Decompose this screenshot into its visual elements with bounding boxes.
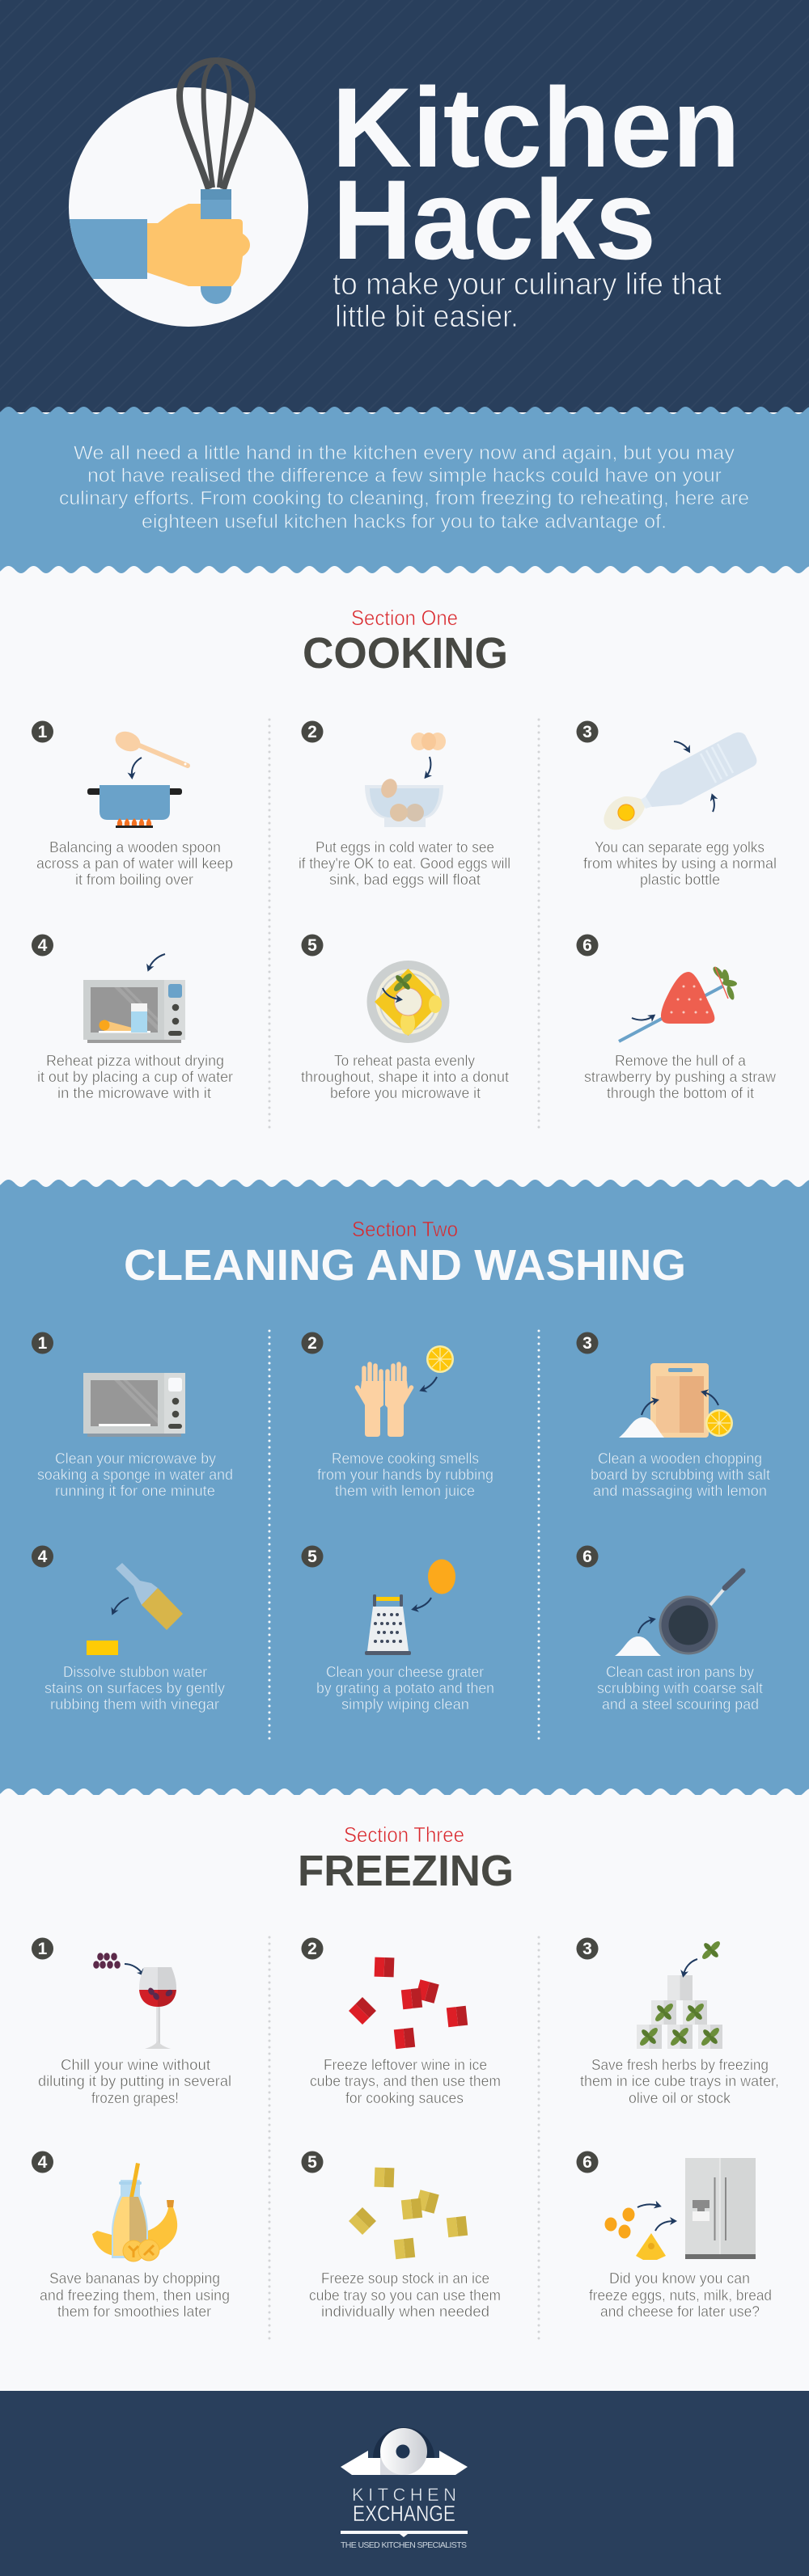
tip text bbox=[299, 839, 510, 888]
number 4: 4 bbox=[38, 2153, 48, 2172]
panel: tip 2 wine cubes bbox=[301, 1937, 501, 2106]
tip text: stains on surfaces by gently bbox=[44, 1680, 225, 1696]
tip text: from your hands by rubbing bbox=[317, 1467, 493, 1483]
subtitle: little bit easier. bbox=[335, 300, 519, 334]
title: Hacks bbox=[332, 156, 656, 283]
panel: tip 2 hands bbox=[301, 1332, 493, 1499]
tip text: rubbing them with vinegar bbox=[50, 1696, 219, 1712]
number 6: 6 bbox=[582, 2153, 592, 2172]
tip text: throughout, shape it into a donut bbox=[301, 1069, 509, 1085]
panel: section one cooking bbox=[32, 606, 777, 1128]
tip text: Freeze leftover wine in ice bbox=[324, 2057, 487, 2073]
number 2: 2 bbox=[307, 1940, 317, 1958]
heading: section three: Section Three bbox=[344, 1822, 464, 1847]
panel: tip 3 herbs bbox=[576, 1937, 779, 2106]
number 1 bbox=[32, 1937, 53, 1960]
tip text bbox=[584, 1053, 777, 1101]
tip text: To reheat pasta evenly bbox=[334, 1053, 475, 1069]
number 1: 1 bbox=[38, 1334, 48, 1353]
icon: fridge, nuts and cheese bbox=[605, 2158, 756, 2260]
logo: Kitchen Exchange bbox=[341, 2427, 468, 2550]
heading: section three bbox=[298, 1822, 514, 1895]
number 3: 3 bbox=[582, 1940, 592, 1958]
icon: eggs and bowl bbox=[365, 733, 446, 827]
icon: smoothie bottle and bananas bbox=[92, 2163, 177, 2261]
number 2: 2 bbox=[307, 1334, 317, 1353]
tip text bbox=[309, 2270, 501, 2320]
number 2: 2 bbox=[307, 723, 317, 741]
tip text bbox=[310, 2057, 501, 2106]
icon: hand holding whisk bbox=[69, 61, 308, 327]
logo: Kitchen Exchange: THE USED KITCHEN SPECIALISTS bbox=[341, 2540, 467, 2550]
logo: Kitchen Exchange: KITCHEN bbox=[352, 2485, 456, 2505]
number 5: 5 bbox=[307, 936, 317, 955]
tip text bbox=[317, 1451, 493, 1499]
number 4: 4 bbox=[38, 1548, 48, 1566]
tip text: plastic bottle bbox=[640, 872, 720, 888]
tip text bbox=[580, 2057, 779, 2106]
tip text: Chill your wine without bbox=[61, 2057, 210, 2073]
intro text: not have realised the difference a few simple hacks could have on your bbox=[87, 465, 722, 487]
number 4 bbox=[32, 1546, 53, 1567]
number 1: 1 bbox=[38, 723, 48, 741]
tip text: it from boiling over bbox=[75, 872, 193, 888]
icon: herb ice cubes bbox=[637, 1940, 722, 2049]
number 3 bbox=[576, 1937, 599, 1960]
panel: tip 3 board bbox=[576, 1332, 770, 1499]
tip text: before you microwave it bbox=[330, 1085, 481, 1101]
tip text bbox=[37, 1451, 233, 1499]
icon: soup stock cubes bbox=[349, 2168, 468, 2259]
heading: section one: COOKING bbox=[303, 629, 508, 678]
logo: Kitchen Exchange: EXCHANGE bbox=[353, 2501, 455, 2526]
tip text: across a pan of water will keep bbox=[36, 855, 233, 872]
tip text bbox=[583, 839, 777, 888]
icon: plastic bottle and egg bbox=[604, 733, 756, 830]
tip text: freeze eggs, nuts, milk, bread bbox=[589, 2287, 772, 2304]
heading: section two bbox=[124, 1217, 686, 1290]
tip text: board by scrubbing with salt bbox=[591, 1467, 770, 1483]
intro text: eighteen useful kitchen hacks for you to take advantage of. bbox=[142, 511, 667, 533]
panel: section two cleaning bbox=[0, 1180, 809, 1797]
tip text: Save bananas by chopping bbox=[49, 2270, 220, 2287]
panel: tip 6 fridge bbox=[576, 2151, 772, 2320]
icon: pan and salt bbox=[615, 1571, 743, 1656]
tip text: Remove cooking smells bbox=[332, 1451, 479, 1467]
panel: tip 1 wine bbox=[32, 1937, 231, 2106]
panel: section three freezing bbox=[32, 1822, 779, 2345]
icon: spoon over pot bbox=[87, 728, 188, 828]
panel: tip 4 pizza bbox=[32, 935, 233, 1101]
tip text: and freezing them, then using bbox=[40, 2287, 230, 2304]
tip text: individually when needed bbox=[321, 2304, 489, 2320]
tip text: scrubbing with coarse salt bbox=[597, 1680, 763, 1696]
tip text: cube tray so you can use them bbox=[309, 2287, 501, 2304]
icon: wine glass and grapes bbox=[93, 1953, 176, 2049]
panel: tip 1 microwave bbox=[32, 1332, 233, 1499]
icon: strawberry and straw bbox=[619, 965, 737, 1041]
number 5 bbox=[301, 935, 324, 956]
heading: section two: CLEANING AND WASHING bbox=[124, 1241, 686, 1290]
subtitle bbox=[332, 268, 722, 334]
number 3 bbox=[576, 1332, 599, 1353]
number 1 bbox=[32, 721, 53, 742]
number 5: 5 bbox=[307, 1548, 317, 1566]
tip text: if they're OK to eat. Good eggs will bbox=[299, 855, 510, 872]
number 3: 3 bbox=[582, 723, 592, 741]
number 4: 4 bbox=[38, 936, 48, 955]
tip text: diluting it by putting in several bbox=[38, 2073, 231, 2089]
panel: tip 3 bottle bbox=[576, 721, 777, 888]
tip text: them with lemon juice bbox=[335, 1483, 475, 1499]
number 6 bbox=[576, 1546, 599, 1567]
tip text: by grating a potato and then bbox=[316, 1680, 494, 1696]
tip text: soaking a sponge in water and bbox=[37, 1467, 233, 1483]
title bbox=[332, 64, 740, 283]
number 6: 6 bbox=[582, 936, 592, 955]
panel: tip 6 strawberry bbox=[576, 935, 777, 1101]
tip text: Remove the hull of a bbox=[615, 1053, 747, 1069]
number 6 bbox=[576, 2151, 599, 2173]
tip text bbox=[301, 1053, 509, 1101]
heading: section one bbox=[303, 606, 508, 678]
tip text: for cooking sauces bbox=[345, 2090, 464, 2106]
tip text: Clean your microwave by bbox=[55, 1451, 216, 1467]
panel: tip 2 eggs bbox=[299, 721, 510, 888]
tip text bbox=[36, 839, 233, 888]
tip text: Reheat pizza without drying bbox=[46, 1053, 224, 1069]
number 2 bbox=[301, 721, 324, 742]
panel: tip 5 soup cubes bbox=[301, 2151, 501, 2320]
number 4 bbox=[32, 2151, 53, 2173]
panel: tip 4 vinegar bbox=[32, 1546, 225, 1712]
number 4 bbox=[32, 935, 53, 956]
tip text: Dissolve stubbon water bbox=[63, 1664, 207, 1680]
tip text: You can separate egg yolks bbox=[595, 839, 765, 855]
panel: tip 1 boil bbox=[32, 721, 233, 888]
tip text: and cheese for later use? bbox=[600, 2304, 760, 2320]
tip text bbox=[37, 1053, 233, 1101]
panel: tip 5 pasta bbox=[301, 935, 509, 1101]
number 5: 5 bbox=[307, 2153, 317, 2172]
number 5 bbox=[301, 2151, 324, 2173]
number 5 bbox=[301, 1546, 324, 1567]
tip text: Clean your cheese grater bbox=[326, 1664, 484, 1680]
tip text bbox=[40, 2270, 230, 2320]
subtitle: to make your culinary life that bbox=[332, 268, 722, 302]
panel: tip 6 pan bbox=[576, 1546, 763, 1712]
number 2 bbox=[301, 1332, 324, 1353]
tip text: sink, bad eggs will float bbox=[329, 872, 481, 888]
tip text bbox=[316, 1664, 494, 1712]
number 2 bbox=[301, 1937, 324, 1960]
icon: chopping board, salt and lemon bbox=[619, 1363, 733, 1438]
number 1: 1 bbox=[38, 1940, 48, 1958]
tip text: strawberry by pushing a straw bbox=[584, 1069, 777, 1085]
title: Kitchen bbox=[332, 64, 740, 191]
tip text bbox=[597, 1664, 763, 1712]
tip text: them in ice cube trays in water, bbox=[580, 2073, 779, 2089]
icon: vinegar bottle and sponge bbox=[87, 1563, 183, 1655]
icon: wine ice cubes bbox=[349, 1957, 468, 2049]
tip text: it out by placing a cup of water bbox=[37, 1069, 233, 1085]
tip text bbox=[44, 1664, 225, 1712]
tip text: Clean cast iron pans by bbox=[606, 1664, 754, 1680]
number 3: 3 bbox=[582, 1334, 592, 1353]
panel: footer bbox=[0, 2391, 809, 2576]
tip text: Put eggs in cold water to see bbox=[316, 839, 494, 855]
tip text: frozen grapes! bbox=[91, 2090, 179, 2106]
heading: section one: Section One bbox=[351, 606, 458, 630]
number 3 bbox=[576, 721, 599, 742]
heading: section three: FREEZING bbox=[298, 1847, 514, 1895]
icon: microwave bbox=[83, 1373, 185, 1437]
icon: microwave with pizza and water bbox=[83, 954, 185, 1043]
panel: hero header bbox=[0, 0, 809, 412]
tip text: olive oil or stock bbox=[629, 2090, 731, 2106]
intro text: We all need a little hand in the kitchen every now and again, but you may bbox=[74, 442, 735, 464]
number 6: 6 bbox=[582, 1548, 592, 1566]
intro text: culinary efforts. From cooking to cleaning, from freezing to reheating, here are bbox=[59, 488, 749, 509]
tip text: through the bottom of it bbox=[607, 1085, 754, 1101]
icon: grater and potato bbox=[365, 1559, 455, 1655]
tip text: them for smoothies later bbox=[57, 2304, 211, 2320]
tip text: Freeze soup stock in an ice bbox=[321, 2270, 489, 2287]
tip text: Did you know you can bbox=[609, 2270, 750, 2287]
tip text: in the microwave with it bbox=[57, 1085, 211, 1101]
tip text bbox=[589, 2270, 772, 2320]
tip text: Balancing a wooden spoon bbox=[49, 839, 221, 855]
tip text: and massaging with lemon bbox=[593, 1483, 767, 1499]
tip text: cube trays, and then use them bbox=[310, 2073, 501, 2089]
tip text: running it for one minute bbox=[55, 1483, 215, 1499]
panel: tip 5 grater bbox=[301, 1546, 494, 1712]
tip text: from whites by using a normal bbox=[583, 855, 777, 872]
intro text bbox=[59, 442, 749, 533]
tip text bbox=[38, 2057, 231, 2106]
panel: intro band bbox=[0, 407, 809, 574]
tip text: and a steel scouring pad bbox=[602, 1696, 759, 1712]
icon: hands and lemon bbox=[358, 1345, 454, 1437]
tip text: simply wiping clean bbox=[341, 1696, 469, 1712]
tip text: Clean a wooden chopping bbox=[598, 1451, 762, 1467]
icon: pasta donut on plate bbox=[367, 961, 450, 1043]
tip text bbox=[591, 1451, 770, 1499]
heading: section two: Section Two bbox=[352, 1217, 458, 1241]
number 1 bbox=[32, 1332, 53, 1353]
panel: tip 4 bananas bbox=[32, 2151, 230, 2320]
tip text: Save fresh herbs by freezing bbox=[591, 2057, 769, 2073]
number 6 bbox=[576, 935, 599, 956]
